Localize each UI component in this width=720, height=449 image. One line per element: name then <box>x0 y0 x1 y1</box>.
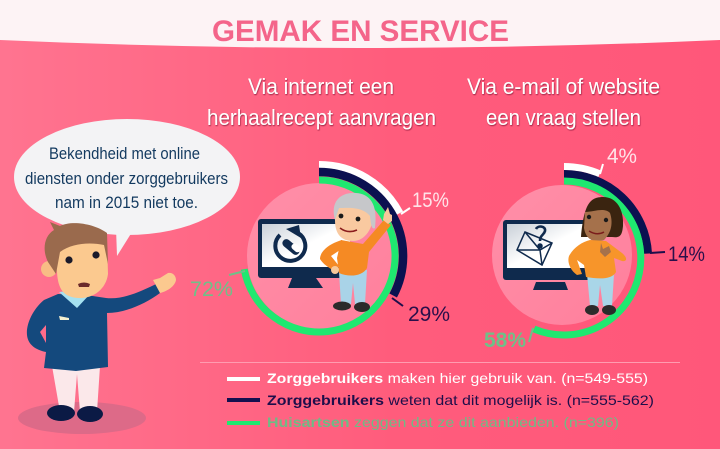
heading: herhaalrecept: Via internet een <box>248 74 394 99</box>
character: older man <box>320 193 392 312</box>
leader lines <box>229 208 410 306</box>
heading: vraag stellen: Via e-mail of website <box>467 74 660 99</box>
label: 29%: 29% <box>408 303 450 326</box>
chart: herhaalrecept <box>190 164 450 332</box>
arc: green 72% <box>244 180 395 332</box>
arc: navy 14% <box>564 174 648 254</box>
character: woman <box>568 197 626 315</box>
icon: repeat prescription <box>275 225 305 261</box>
legend: gebruik: Zorggebruikers maken hier gebruik van. (n=549-555) <box>267 370 648 386</box>
label: 4%: 4% <box>607 145 637 168</box>
label: 14%: 14% <box>668 243 705 266</box>
legend: huisartsen: Huisartsen zeggen dat ze dit aanbieden. (n=396) <box>267 414 619 430</box>
speech bubble <box>14 119 240 256</box>
arc: white 15% <box>319 164 400 213</box>
icon: envelope question <box>517 227 552 265</box>
title: GEMAK EN SERVICE <box>212 15 509 48</box>
arc: navy 29% <box>319 172 403 296</box>
divider <box>200 362 680 363</box>
leader lines <box>529 164 665 342</box>
chart: vraag stellen <box>484 145 705 352</box>
speech bubble: nam in 2015 niet toe. <box>55 193 198 212</box>
top band <box>0 0 720 48</box>
legend: weten: Zorggebruikers weten dat dit mogelijk is. (n=555-562) <box>267 392 654 408</box>
label: 15%: 15% <box>412 189 449 212</box>
label: 58%: 58% <box>484 329 526 352</box>
heading: herhaalrecept: herhaalrecept aanvragen <box>207 105 436 130</box>
speech bubble: diensten onder zorggebruikers <box>25 169 228 188</box>
monitor <box>503 220 591 290</box>
heading: vraag stellen <box>467 74 660 130</box>
arc: white 4% <box>564 166 600 174</box>
heading: vraag stellen: een vraag stellen <box>486 105 641 130</box>
heading: herhaalrecept <box>207 74 436 130</box>
pink circle <box>492 185 632 325</box>
pink circle <box>247 183 393 329</box>
arc: green 58% <box>534 181 641 335</box>
label: 72%: 72% <box>190 278 233 301</box>
character: man in blue jacket <box>18 222 176 434</box>
monitor <box>258 219 350 288</box>
legend <box>227 370 654 430</box>
speech bubble: Bekendheid met online <box>49 144 200 163</box>
